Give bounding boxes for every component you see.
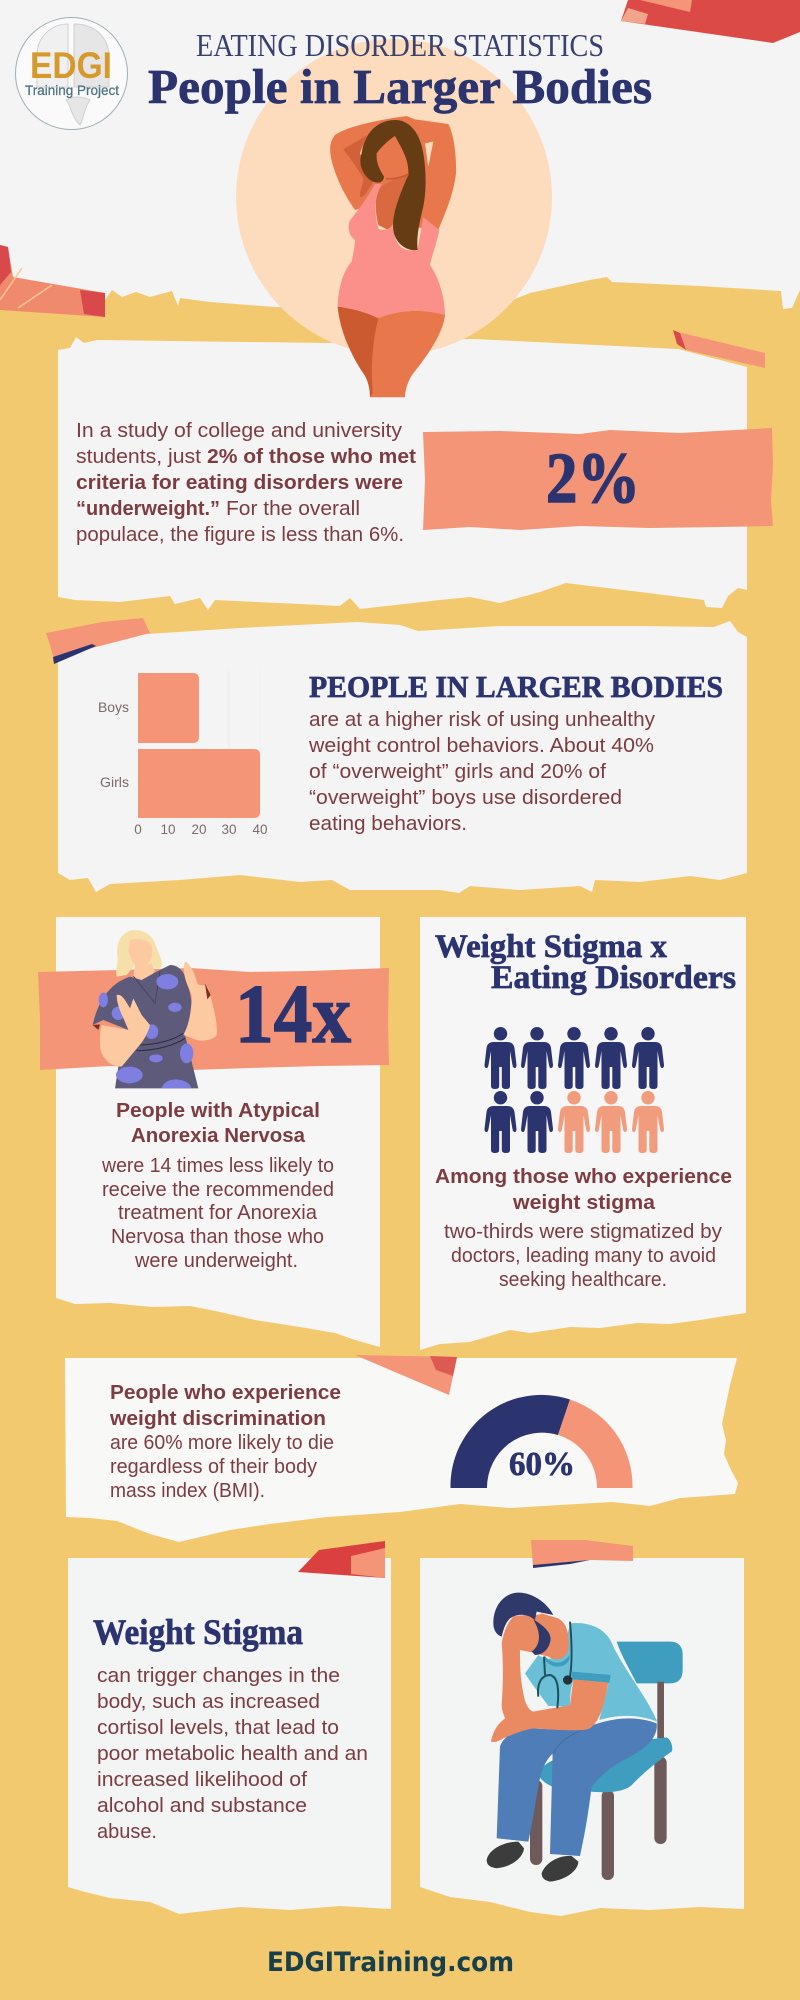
chart: 60 percent half donut: 60%: [509, 1446, 575, 1483]
tape: panel two left: [46, 618, 150, 664]
text: unhealthy weight control behaviors: weight control behaviors. About 40%: [308, 735, 654, 757]
text: physiological effects of weight stigma: poor metabolic health and an: [97, 1743, 368, 1765]
footer: website: EDGITraining.com: [267, 1947, 514, 1978]
text: unhealthy weight control behaviors: of “overweight” girls and 20% of: [309, 761, 606, 783]
heading: people in larger bodies: PEOPLE IN LARGER BODIES: [309, 669, 723, 704]
icon array: ten people, seven navy and three peach: [484, 1027, 664, 1153]
bar chart: boys and girls disordered eating: 40: [252, 822, 268, 837]
text: college student statistic: For the overall: [226, 498, 360, 520]
heading: weight stigma: Weight Stigma: [93, 1612, 303, 1652]
title: [148, 27, 652, 114]
heading: weight stigma x eating disorders: Weight Stigma x: [435, 929, 667, 965]
text: unhealthy weight control behaviors: eating behaviors.: [309, 813, 467, 835]
text: weight stigma from doctors: Among those who experience: [435, 1166, 732, 1188]
bar chart: boys and girls disordered eating: 10: [160, 822, 176, 837]
bar chart: boys and girls disordered eating: 20: [191, 822, 207, 837]
panel: header paper: [0, 0, 800, 310]
text: college student statistic: populace, the figure is less than 6%.: [76, 524, 404, 546]
text: physiological effects of weight stigma: can trigger changes in the: [97, 1665, 340, 1687]
logo: EDGI Training Project: Training Project: [25, 82, 119, 98]
text: atypical anorexia nervosa: were 14 times less likely to: [101, 1155, 334, 1177]
chart: 60 percent half donut: [450, 1395, 633, 1488]
banner: 2 percent: 2%: [546, 438, 640, 518]
text: weight discrimination: regardless of their body: [110, 1456, 317, 1478]
text: atypical anorexia nervosa: were underweight.: [134, 1250, 298, 1272]
text: college student statistic: criteria for eating disorders were: [76, 472, 403, 494]
text: atypical anorexia nervosa: People with Atypical: [116, 1100, 320, 1122]
text: weight stigma from doctors: two-thirds were stigmatized by: [444, 1221, 722, 1243]
tape: left edge: [0, 245, 105, 317]
text: weight discrimination: mass index (BMI).: [110, 1480, 265, 1502]
bar chart: boys and girls disordered eating: 0: [134, 822, 142, 837]
text: weight discrimination: are 60% more likely to die: [110, 1432, 334, 1454]
heading: weight stigma x eating disorders: Eating Disorders: [491, 960, 736, 996]
panel: 14x paper: [56, 917, 380, 1347]
text: weight stigma from doctors: seeking healthcare.: [499, 1269, 667, 1291]
bar chart: boys and girls disordered eating: Boys: [98, 700, 129, 715]
text: weight discrimination: [109, 1382, 341, 1502]
illustration: blonde woman in dress: [93, 930, 217, 1088]
text: atypical anorexia nervosa: [101, 1100, 334, 1272]
banner: 2 percent: [423, 428, 773, 530]
illustration: exhausted doctor on chair: [487, 1593, 683, 1882]
text: physiological effects of weight stigma: cortisol levels, that lead to: [97, 1717, 339, 1739]
text: weight stigma from doctors: [435, 1166, 732, 1291]
text: physiological effects of weight stigma: abuse.: [97, 1821, 157, 1843]
banner: 14x: 14x: [235, 968, 351, 1061]
tape: weight stigma panel: [298, 1541, 385, 1578]
heading: weight stigma x eating disorders: [435, 929, 736, 996]
banner: 14x: [38, 968, 389, 1070]
text: college student statistic: “underweight.”: [76, 498, 220, 520]
text: college student statistic: 2% of those who met: [207, 446, 416, 468]
text: physiological effects of weight stigma: [97, 1665, 368, 1843]
text: atypical anorexia nervosa: treatment for Anorexia: [118, 1202, 318, 1224]
panel: weight stigma text paper: [68, 1558, 391, 1914]
logo: EDGI Training Project: [16, 18, 128, 130]
text: college student statistic: students, just: [76, 446, 201, 468]
text: atypical anorexia nervosa: receive the recommended: [102, 1179, 334, 1201]
tape: doctor panel: [531, 1540, 633, 1568]
text: college student statistic: [76, 420, 416, 546]
text: unhealthy weight control behaviors: “overweight” boys use disordered: [309, 787, 622, 809]
title: People in Larger Bodies: [148, 59, 652, 114]
bar chart: boys and girls disordered eating: [98, 670, 268, 837]
text: unhealthy weight control behaviors: are at a higher risk of using unhealthy: [309, 709, 655, 731]
logo: EDGI Training Project: EDGI: [30, 45, 112, 86]
panel: doctor illustration paper: [420, 1558, 744, 1916]
decorative peach circle: [236, 39, 552, 355]
panel: weight discrimination paper: [65, 1358, 738, 1542]
text: physiological effects of weight stigma: increased likelihood of: [97, 1769, 307, 1791]
text: unhealthy weight control behaviors: [308, 709, 655, 835]
text: weight discrimination: weight discrimination: [109, 1408, 326, 1430]
illustration: woman in pink swimsuit: [330, 116, 456, 397]
text: physiological effects of weight stigma: body, such as increased: [97, 1691, 320, 1713]
text: weight discrimination: People who experience: [110, 1382, 341, 1404]
panel: weight stigma and eating disorders paper: [420, 917, 746, 1350]
tape: panel one right: [673, 330, 765, 368]
tape: top right: [621, 0, 800, 43]
panel: 2 percent statistic paper: [58, 337, 747, 610]
text: atypical anorexia nervosa: Anorexia Nervosa: [131, 1125, 306, 1147]
panel: bar chart paper: [58, 621, 747, 893]
bar chart: boys and girls disordered eating: Girls: [100, 775, 129, 790]
text: atypical anorexia nervosa: Nervosa than those who: [111, 1226, 324, 1248]
text: physiological effects of weight stigma: alcohol and substance: [97, 1795, 307, 1817]
bar chart: boys and girls disordered eating: 30: [221, 822, 237, 837]
title: EATING DISORDER STATISTICS: [196, 27, 604, 63]
text: weight stigma from doctors: doctors, leading many to avoid: [451, 1245, 716, 1267]
text: weight stigma from doctors: weight stigma: [512, 1192, 656, 1214]
tape: discrimination panel: [355, 1355, 457, 1395]
text: college student statistic: In a study of college and university: [76, 420, 402, 442]
